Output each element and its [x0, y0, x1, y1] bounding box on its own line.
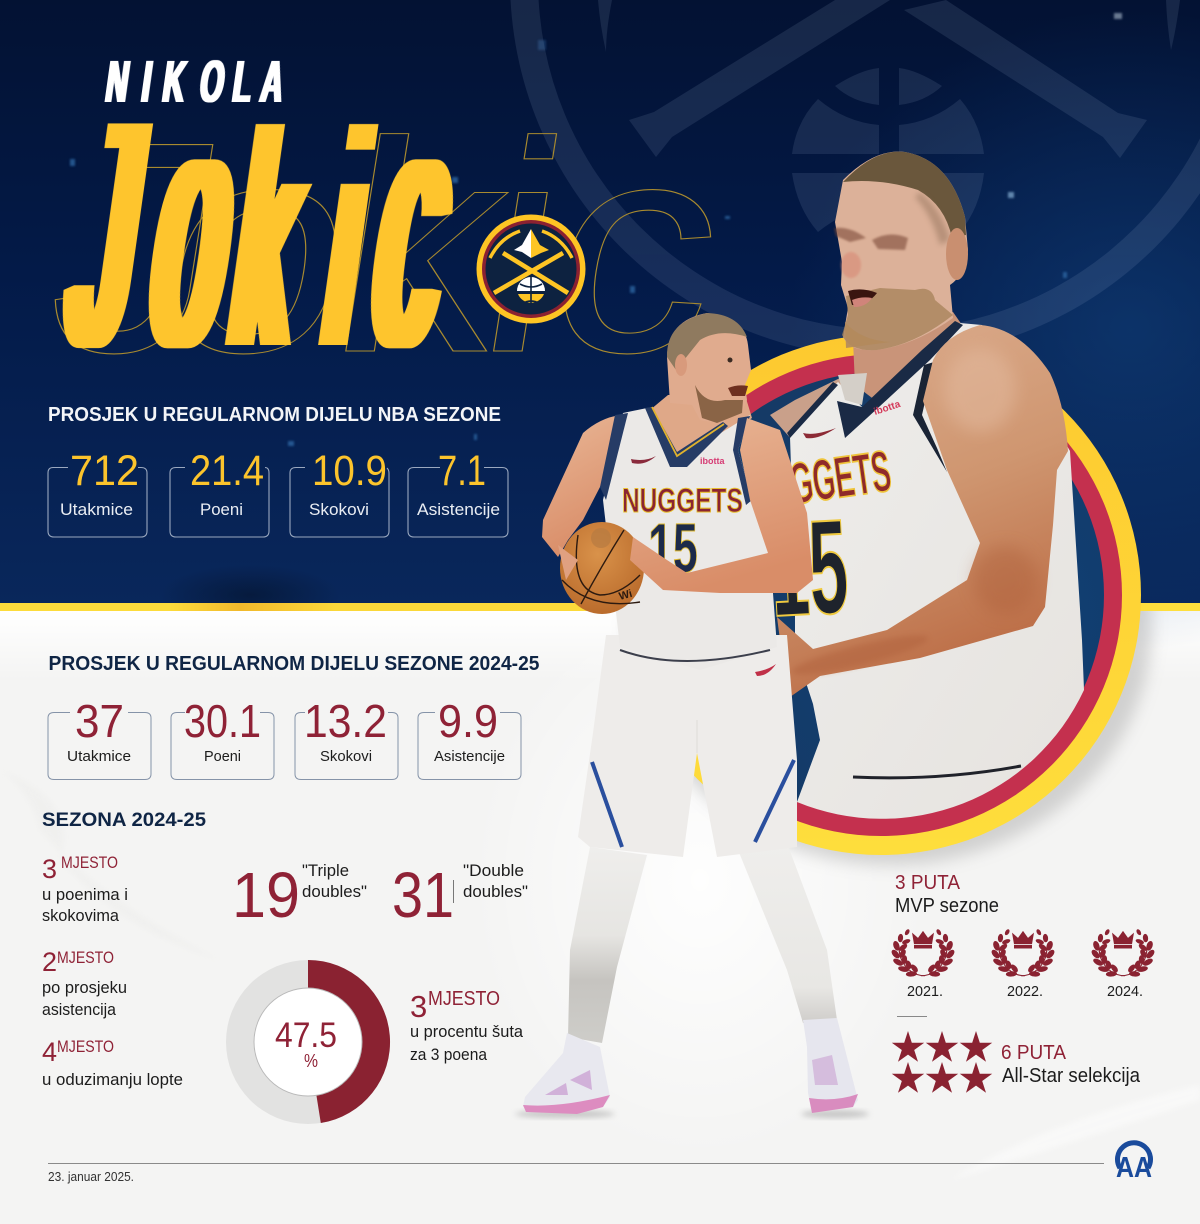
stat box: career assists	[408, 447, 508, 537]
stat box: career rebounds: Skokovi	[309, 500, 369, 519]
shoe shadows	[515, 1110, 615, 1118]
circular badge rings	[692, 338, 1158, 870]
forearm and hand	[630, 418, 813, 593]
icon: MVP laurel 2024: 2024.	[1107, 983, 1143, 1000]
rank: second in assists: asistencija	[42, 1001, 117, 1019]
MVP count	[895, 872, 999, 917]
date: 23. januar 2025.	[48, 1170, 134, 1184]
stat box: season points: 30.1	[184, 695, 261, 747]
stat: double doubles: doubles"	[463, 883, 528, 901]
title: surname: k	[218, 68, 320, 410]
rank: third in points and rebounds	[42, 853, 128, 925]
title: surname: i	[312, 68, 384, 410]
rank: second in assists: po prosjeku	[42, 979, 127, 997]
rank: third in three point percentage: 3	[410, 989, 427, 1024]
icon: Anadolu Agency logo: AA	[1116, 1152, 1152, 1184]
stat: double doubles: 31	[392, 859, 454, 931]
head	[667, 313, 751, 423]
sponsor: ibotta	[873, 399, 902, 418]
stat box: career games: Utakmice	[60, 500, 133, 519]
MVP count: MVP sezone	[895, 895, 999, 917]
stat: double doubles	[392, 859, 528, 931]
donut chart: three point percentage: 47.5	[275, 1016, 337, 1055]
neck	[853, 312, 962, 404]
icon: MVP laurel 2021	[890, 929, 956, 1000]
icon: MVP laurel 2024	[1090, 929, 1156, 1000]
muscular arm	[777, 325, 1068, 697]
full body player	[515, 313, 869, 1118]
icon: all-star stars	[892, 1031, 992, 1093]
rank: third in three point percentage	[410, 988, 524, 1064]
stat box: career points: 21.4	[190, 447, 264, 495]
head	[835, 152, 968, 350]
hair	[843, 152, 966, 238]
full body player: ibotta	[700, 456, 725, 466]
title: first name: I	[138, 49, 156, 116]
stat: triple doubles: 19	[232, 859, 300, 931]
watermark: Denver Nuggets emblem	[510, 0, 1200, 358]
collar	[838, 373, 867, 405]
beard	[695, 385, 743, 423]
neck	[650, 395, 752, 470]
rank: third in three point percentage: u procentu šuta	[410, 1023, 524, 1041]
background: navy arena panel	[0, 0, 1200, 650]
icon: Denver Nuggets logo	[476, 214, 586, 324]
title: surname: J	[54, 54, 161, 414]
donut chart: three point percentage	[226, 960, 390, 1124]
rank: third in three point percentage: za 3 poena	[410, 1046, 488, 1064]
rank: fourth in steals: u oduzimanju lopte	[42, 1071, 183, 1089]
brows and eyes	[834, 228, 908, 250]
icon: MVP laurel 2022: 2022.	[1007, 983, 1043, 1000]
jersey	[603, 407, 777, 670]
title: first name: L	[229, 49, 257, 116]
stat box: season rebounds: 13.2	[304, 695, 387, 747]
jersey lettering: NUGGETS	[622, 482, 743, 520]
hair	[667, 313, 747, 370]
rank: third in three point percentage: MJESTO	[428, 988, 500, 1010]
title: first name: N	[102, 49, 133, 116]
stat box: season rebounds: Skokovi	[320, 748, 372, 765]
stat box: season games	[48, 695, 151, 780]
stat box: season rebounds	[295, 695, 398, 780]
rank: second in assists: 2	[42, 947, 57, 977]
large player portrait: 15	[766, 490, 852, 645]
yellow divider bar	[0, 603, 1200, 611]
ear	[675, 354, 687, 376]
icon: MVP laurel 2021: 2021.	[907, 983, 943, 1000]
rank: third in points and rebounds: MJESTO	[61, 853, 118, 872]
rank: fourth in steals: MJESTO	[57, 1037, 114, 1056]
stat box: season games: 37	[75, 695, 124, 747]
full body player: 15	[648, 510, 698, 587]
shoes	[523, 1033, 610, 1113]
rear arm	[770, 378, 845, 440]
jersey lettering: NUGGETS	[745, 439, 895, 522]
heading: season 2024-25: SEZONA 2024-25	[42, 810, 206, 831]
rank: fourth in steals	[42, 1037, 183, 1089]
background: light paper panel	[0, 600, 1200, 1224]
stat box: season games: Utakmice	[67, 748, 131, 765]
stat: double doubles: "Double	[463, 862, 524, 880]
shorts	[578, 635, 797, 857]
title: first name: A	[257, 49, 288, 116]
title: first name: K	[159, 49, 190, 116]
title: outlined ghost surname: c	[530, 80, 745, 415]
stat box: career games	[48, 447, 147, 537]
icon: Anadolu Agency logo	[1116, 1143, 1152, 1184]
stat box: career assists: 7.1	[438, 447, 486, 495]
stat box: career games: 712	[70, 447, 139, 495]
rank: second in assists: MJESTO	[57, 948, 114, 967]
all-star count: All-Star selekcija	[1002, 1065, 1141, 1087]
armhole trim	[913, 362, 947, 472]
stat box: season assists: Asistencije	[434, 748, 505, 765]
stat box: career rebounds: 10.9	[312, 447, 387, 495]
all-star count: 6 PUTA	[1001, 1042, 1067, 1064]
jersey	[787, 323, 1084, 819]
title: outlined ghost surname: k	[314, 80, 534, 415]
nose	[841, 252, 861, 278]
stat: triple doubles	[232, 859, 367, 931]
full body player: Wi	[618, 588, 634, 603]
large player portrait	[745, 152, 1084, 819]
stat box: season assists: 9.9	[438, 695, 498, 747]
title: first name: O	[196, 49, 229, 116]
stat box: career points: Poeni	[200, 500, 243, 519]
MVP count: 3 PUTA	[895, 872, 961, 894]
title: surname: o	[134, 34, 256, 419]
stat box: career assists: Asistencije	[417, 500, 500, 519]
title: outlined ghost surname: i	[462, 80, 587, 415]
basketball	[560, 522, 644, 614]
stat box: season assists	[418, 695, 521, 780]
stat box: career points	[170, 447, 269, 537]
title: outlined ghost surname: o	[144, 80, 378, 415]
title: outlined ghost surname: J	[32, 80, 247, 415]
stat: triple doubles: "Triple	[302, 862, 349, 880]
rank: third in points and rebounds: u poenima i	[42, 886, 128, 904]
beard	[842, 288, 953, 350]
mouth	[848, 289, 877, 305]
all-star count	[1001, 1042, 1141, 1087]
heading: season averages: PROSJEK U REGULARNOM DIJELU SEZONE 2024-25	[48, 653, 540, 675]
stat box: season points	[171, 695, 274, 780]
icon: MVP laurel 2022	[990, 929, 1056, 1000]
rank: second in assists	[42, 947, 127, 1019]
title: surname: c	[357, 34, 471, 419]
donut chart: three point percentage: %	[304, 1051, 318, 1071]
stat box: season points: Poeni	[204, 748, 241, 765]
bent arm	[542, 415, 622, 557]
ear	[946, 228, 968, 280]
swoosh	[803, 428, 836, 438]
stat box: career rebounds	[290, 447, 389, 537]
rank: fourth in steals: 4	[42, 1037, 57, 1067]
rank: third in points and rebounds: 3	[42, 854, 57, 884]
heading: career averages: PROSJEK U REGULARNOM DIJELU NBA SEZONE	[48, 403, 501, 426]
stat: triple doubles: doubles"	[302, 883, 367, 901]
rank: third in points and rebounds: skokovima	[42, 907, 120, 925]
legs	[568, 847, 647, 1043]
